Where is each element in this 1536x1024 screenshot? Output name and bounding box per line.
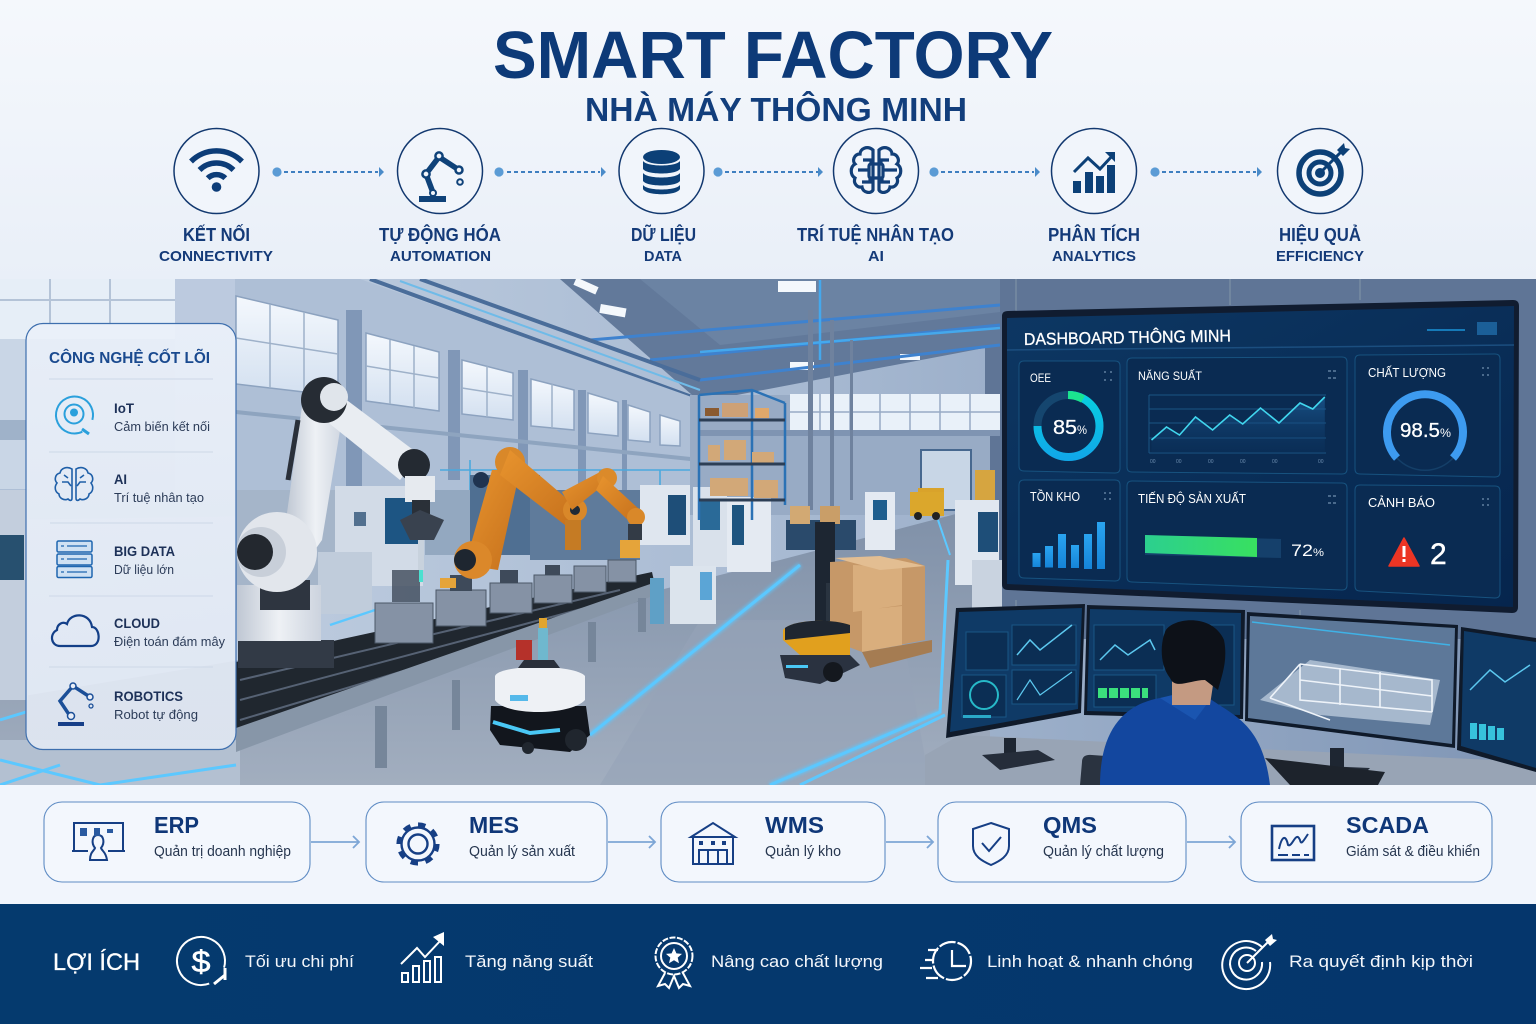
productivity tile: 00	[1272, 459, 1278, 465]
step: efficiency: EFFICIENCY	[1276, 248, 1364, 265]
item: cloud: CLOUD	[114, 616, 160, 631]
arrow 4	[929, 167, 1040, 177]
card: QMS	[938, 802, 1186, 882]
assembly fixtures	[375, 540, 640, 643]
orange robot arm 1	[454, 447, 587, 579]
benefit: decisions	[1222, 934, 1473, 989]
inventory tile: TỒN KHO	[1030, 489, 1080, 504]
item: cloud	[52, 615, 225, 649]
benefit: quality	[656, 938, 883, 988]
step: connectivity: CONNECTIVITY	[159, 248, 273, 265]
benefits band: LỢI ÍCH	[53, 949, 140, 976]
step: analytics: PHÂN TÍCH	[1048, 224, 1140, 245]
ceiling	[370, 277, 1000, 402]
benefit: cost	[170, 930, 354, 992]
step: connectivity	[159, 128, 273, 265]
card: SCADA: Giám sát & điều khiển	[1346, 844, 1480, 860]
item: AI: Trí tuệ nhân tạo	[114, 490, 204, 505]
production progress tile: %	[1313, 547, 1324, 559]
item: big data: Dữ liệu lớn	[114, 562, 174, 577]
item: IoT: IoT	[114, 401, 135, 416]
step: automation	[379, 128, 501, 265]
benefit: decisions: Ra quyết định kịp thời	[1289, 952, 1473, 971]
warehouse shelf	[699, 390, 785, 520]
item: big data	[57, 541, 175, 578]
production progress tile: 72	[1291, 541, 1313, 560]
production progress tile	[1127, 481, 1347, 590]
card: ERP	[44, 802, 310, 882]
item: IoT: Cảm biến kết nối	[114, 419, 210, 434]
arrow 1	[272, 167, 384, 177]
item: robotics: Robot tự động	[114, 707, 198, 722]
step: automation: AUTOMATION	[390, 248, 491, 265]
control room monitors	[946, 604, 1536, 776]
arrow MES to WMS	[608, 836, 655, 848]
card: MES: MES	[469, 812, 519, 838]
benefits band	[0, 904, 1536, 1024]
card: ERP: Quản trị doanh nghiệp	[154, 844, 291, 860]
left wall upper and windows	[0, 279, 690, 490]
arrow WMS to QMS	[886, 836, 933, 848]
benefit: quality: Nâng cao chất lượng	[711, 952, 883, 971]
quality tile	[1355, 354, 1500, 477]
step: AI: AI	[868, 248, 884, 265]
step: data: DATA	[644, 248, 682, 265]
benefit: productivity: Tăng năng suất	[465, 952, 593, 971]
card: SCADA	[1241, 802, 1492, 882]
arrow QMS to SCADA	[1187, 836, 1235, 848]
conveyor	[236, 572, 664, 768]
orange robot arm 2	[562, 468, 645, 540]
arrow ERP to MES	[311, 836, 359, 848]
alert tile: 2	[1430, 538, 1447, 571]
item: robotics	[58, 683, 198, 726]
productivity tile	[1127, 357, 1347, 474]
operator desk	[925, 735, 1536, 785]
inventory tile	[1019, 480, 1120, 581]
item: big data: BIG DATA	[114, 544, 175, 559]
alert tile	[1355, 485, 1500, 598]
panel: core technologies: CÔNG NGHỆ CỐT LÕI	[49, 347, 210, 367]
systems strip	[0, 785, 1536, 904]
step: data	[619, 128, 704, 265]
white robot arm	[236, 377, 444, 668]
step: connectivity: KẾT NỐI	[183, 224, 250, 245]
card: MES: Quản lý sản xuất	[469, 844, 575, 860]
card: QMS: QMS	[1043, 812, 1097, 838]
step: analytics	[1048, 128, 1140, 265]
benefit: agility	[920, 942, 1193, 980]
page background	[0, 0, 1536, 279]
productivity tile: 00	[1208, 459, 1214, 465]
quality tile: %	[1440, 426, 1451, 440]
OEE tile	[1019, 361, 1120, 473]
factory scene	[0, 277, 1536, 785]
back hall	[690, 310, 1000, 516]
alert tile: CẢNH BÁO	[1368, 495, 1435, 510]
item: robotics: ROBOTICS	[114, 689, 183, 704]
benefit: cost: $	[192, 944, 210, 979]
card: MES	[366, 802, 607, 882]
benefit: productivity	[401, 932, 593, 982]
card: WMS: Quản lý kho	[765, 844, 841, 860]
forklift AGV	[780, 522, 932, 684]
step: efficiency	[1276, 128, 1364, 265]
step: AI	[797, 128, 954, 265]
productivity tile: 00	[1240, 459, 1246, 465]
production progress tile: TIẾN ĐỘ SẢN XUẤT	[1138, 491, 1246, 506]
wall dashboard: DASHBOARD THÔNG MINH	[1024, 326, 1231, 349]
title: SMART FACTORY	[493, 18, 1053, 93]
item: AI: AI	[114, 472, 127, 487]
left machines behind panel	[0, 420, 28, 700]
right wall	[985, 279, 1536, 639]
mid machines	[236, 475, 1002, 624]
arrow 3	[713, 167, 823, 177]
item: AI	[55, 468, 204, 505]
process flow	[159, 128, 1364, 265]
OEE tile: %	[1077, 423, 1087, 437]
step: efficiency: HIỆU QUẢ	[1279, 224, 1361, 245]
card: WMS: WMS	[765, 812, 824, 838]
wall dashboard	[1002, 300, 1519, 613]
step: analytics: ANALYTICS	[1052, 248, 1136, 265]
OEE tile: OEE	[1030, 371, 1051, 385]
panel: core technologies	[26, 324, 236, 750]
mobile robot	[490, 618, 590, 754]
operator	[1080, 620, 1385, 785]
quality tile: CHẤT LƯỢNG	[1368, 365, 1446, 380]
benefit: agility: Linh hoạt & nhanh chóng	[987, 952, 1193, 971]
OEE tile: 85	[1053, 417, 1077, 439]
card: ERP: ERP	[154, 812, 199, 838]
benefit: cost: Tối ưu chi phí	[245, 952, 354, 971]
productivity tile: NĂNG SUẤT	[1138, 368, 1203, 383]
quality tile: 98.5	[1400, 420, 1440, 442]
productivity tile: 00	[1150, 459, 1156, 465]
subtitle: NHÀ MÁY THÔNG MINH	[585, 90, 967, 128]
arrow 5	[1150, 167, 1262, 177]
step: automation: TỰ ĐỘNG HÓA	[379, 224, 501, 245]
productivity tile: 00	[1176, 459, 1182, 465]
arrow 2	[494, 167, 606, 177]
item: IoT	[50, 390, 210, 440]
card: SCADA: SCADA	[1346, 812, 1429, 838]
productivity tile: 00	[1318, 459, 1324, 465]
step: data: DỮ LIỆU	[631, 224, 696, 245]
card: WMS	[661, 802, 885, 882]
item: cloud: Điện toán đám mây	[114, 634, 225, 649]
floor guide lights	[0, 520, 950, 785]
floor	[0, 505, 990, 785]
step: AI: TRÍ TUỆ NHÂN TẠO	[797, 224, 954, 245]
card: QMS: Quản lý chất lượng	[1043, 844, 1164, 860]
